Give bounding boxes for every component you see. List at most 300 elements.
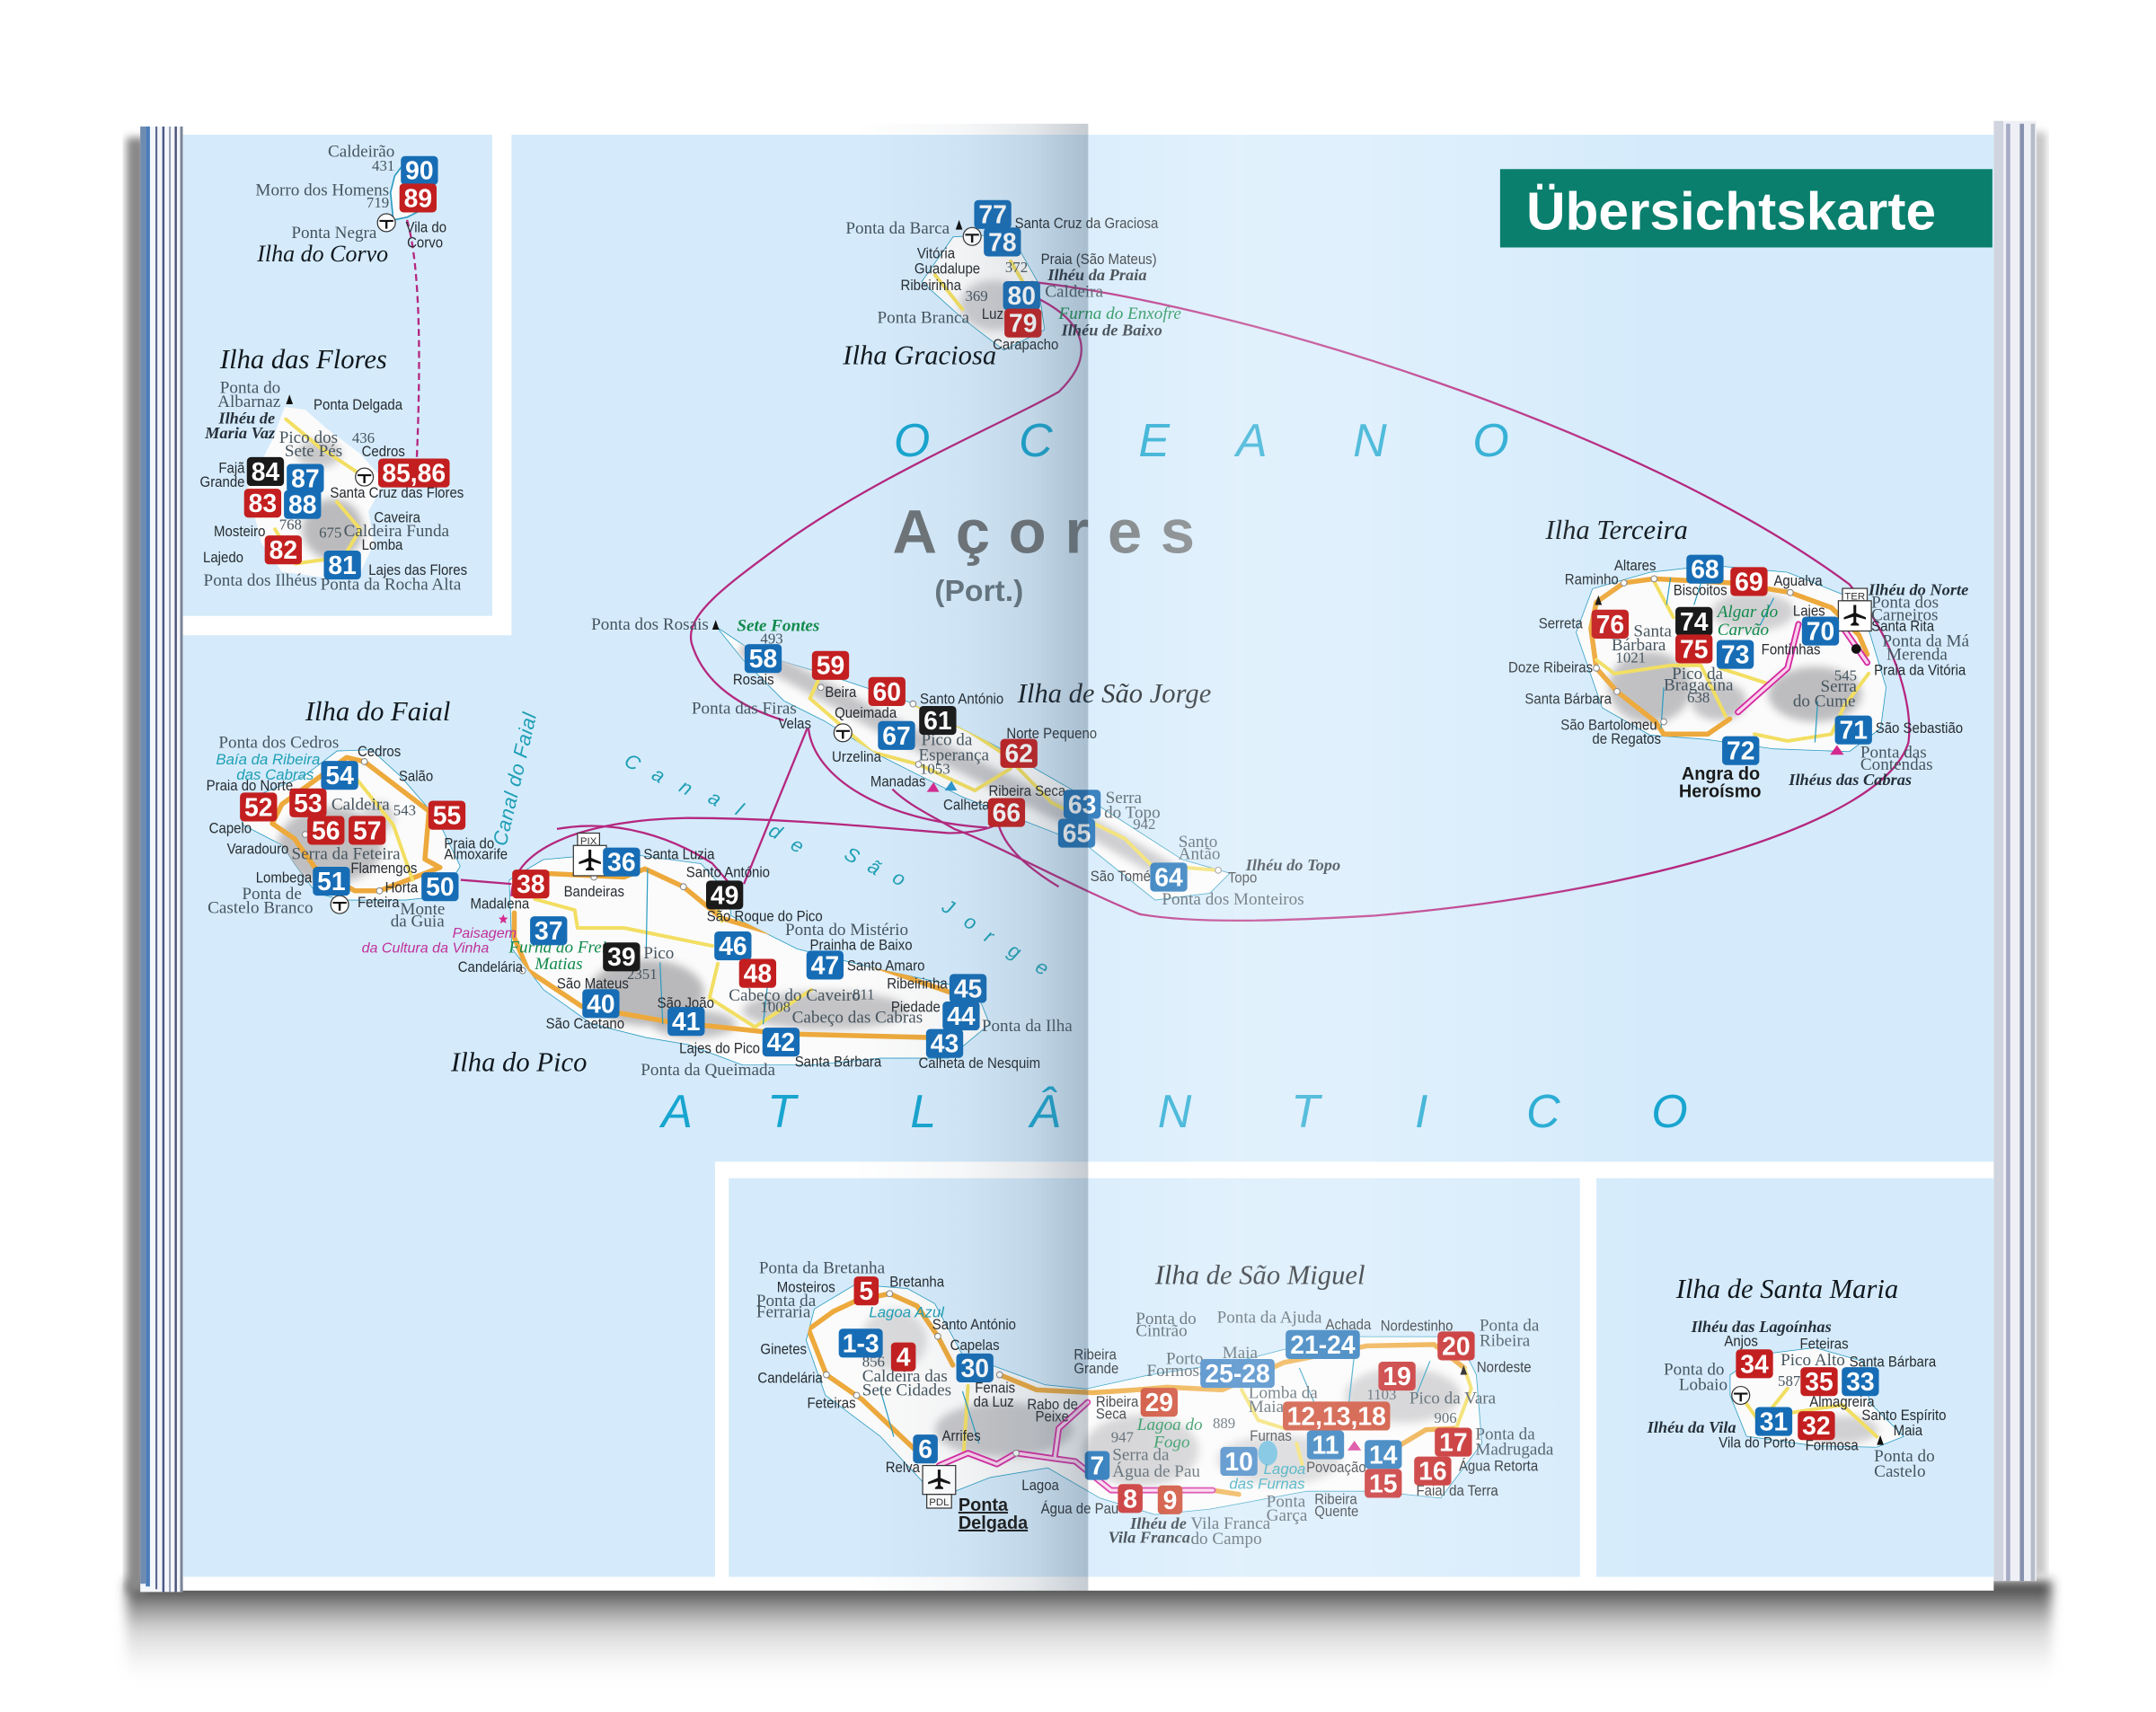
labels: Pico: Ribeirinha xyxy=(887,976,948,993)
labels: São Miguel east: Nordeste xyxy=(1477,1360,1532,1376)
labels: São Miguel west: Ferraria xyxy=(756,1302,811,1321)
labels: São Jorge: Esperança xyxy=(918,746,990,764)
labels: São Miguel east: Fogo xyxy=(1153,1434,1190,1452)
badge 58: 58 xyxy=(749,644,777,673)
labels: São Miguel west: Delgada xyxy=(959,1513,1029,1533)
labels: Pico: Pico xyxy=(643,944,674,963)
labels: Corvo and Flores: Caldeira Funda xyxy=(344,522,450,541)
badge 71: 71 xyxy=(1839,716,1868,745)
labels: Corvo and Flores: Corvo xyxy=(407,235,443,252)
labels: São Jorge: 493 xyxy=(760,630,783,647)
label: Paisagem heritage marker xyxy=(499,914,508,923)
badge 74: 74 xyxy=(1680,607,1709,636)
labels: Graciosa: 372 xyxy=(1005,259,1028,276)
labels: Faial: Castelo Branco xyxy=(208,898,314,917)
badge 65: 65 xyxy=(1063,818,1091,847)
labels: Corvo and Flores: 675 xyxy=(319,524,341,541)
labels: Corvo and Flores: Ponta Delgada xyxy=(314,397,402,413)
badge 87: 87 xyxy=(291,464,320,493)
labels: São Jorge: Ribeira Seca xyxy=(989,783,1065,799)
icon: lighthouse Albarnaz xyxy=(286,394,293,404)
badge 63: 63 xyxy=(1068,790,1096,818)
labels: São Miguel west: Seca xyxy=(1096,1407,1127,1423)
badge 9: 9 xyxy=(1163,1486,1177,1514)
labels: Santa Maria: Anjos xyxy=(1724,1334,1758,1350)
labels: Faial: Cedros xyxy=(358,744,401,760)
badge 14: 14 xyxy=(1369,1440,1398,1469)
badge 47: 47 xyxy=(811,950,839,979)
badge 6: 6 xyxy=(918,1434,932,1463)
labels: Graciosa: Furna do Enxofre xyxy=(1058,304,1181,323)
badge 64: 64 xyxy=(1154,862,1183,891)
icon: peak markers Calheta xyxy=(927,781,957,792)
labels: Pico xyxy=(362,847,1073,1080)
labels: Faial: Varadouro xyxy=(227,842,289,858)
labels: Graciosa: Ribeirinha xyxy=(901,278,961,294)
labels: São Miguel east: Quente xyxy=(1314,1504,1358,1520)
badge 57: 57 xyxy=(353,816,381,844)
badge 78: 78 xyxy=(988,227,1017,256)
labels: Graciosa: 369 xyxy=(965,287,988,304)
labels: Terceira xyxy=(1508,515,1970,802)
labels: Terceira: 638 xyxy=(1687,689,1710,706)
right page stack edge xyxy=(1993,121,2037,1581)
labels: Terceira: Serra xyxy=(1820,677,1857,696)
badge 44: 44 xyxy=(947,1002,976,1030)
labels: São Jorge: Ilhéu do Topo xyxy=(1245,856,1340,874)
title banner: Übersichtskarte: Übersichtskarte xyxy=(1526,181,1936,242)
ocean label: ATLÂNTICO: Â xyxy=(1027,1086,1061,1138)
ocean label: ATLÂNTICO: T xyxy=(1291,1086,1322,1138)
labels: Terceira: Contendas xyxy=(1860,755,1933,774)
labels: São Miguel east: Serra da xyxy=(1112,1445,1170,1464)
icon: airport box Pico xyxy=(573,834,606,876)
labels: Pico: São Roque do Pico xyxy=(707,909,823,925)
labels: Terceira: Ponta dos xyxy=(1871,594,1939,613)
labels: São Jorge: Urzelina xyxy=(832,749,881,765)
badge 33: 33 xyxy=(1846,1367,1875,1396)
labels: São Miguel west: Ponta xyxy=(959,1496,1009,1515)
island: Graciosa xyxy=(922,234,1045,350)
labels: São Jorge: Ilha de São Jorge xyxy=(1017,678,1211,709)
icon: lighthouse Serreta xyxy=(1595,596,1602,604)
labels: São Jorge: São Tomé xyxy=(1091,869,1151,885)
icon: airport box Terceira xyxy=(1838,588,1871,631)
labels: Pico: Ilha do Pico xyxy=(450,1046,587,1077)
ocean label: ATLÂNTICO: C xyxy=(1526,1086,1560,1138)
sea background panel xyxy=(183,135,1993,1577)
badge 82: 82 xyxy=(270,535,297,564)
badge 37: 37 xyxy=(535,916,562,945)
ocean label: OCEANO: O xyxy=(1472,415,1509,467)
labels: Terceira: Bragacina xyxy=(1664,675,1734,694)
labels: Faial: Ilha do Faial xyxy=(305,696,450,727)
labels: Santa Maria: Feteiras xyxy=(1800,1337,1849,1353)
labels: São Miguel west: Sete Cidades xyxy=(862,1381,951,1400)
labels: Pico: 1008 xyxy=(760,998,791,1015)
badge 89: 89 xyxy=(404,183,432,212)
labels: São Miguel west: Relva xyxy=(886,1460,920,1476)
labels: Pico: Santo António xyxy=(686,865,770,881)
labels: Corvo and Flores: Lajedo xyxy=(203,550,243,566)
labels: Faial: Caldeira xyxy=(331,795,390,814)
badge 19: 19 xyxy=(1383,1362,1411,1390)
panel: Corvo and Flores inset xyxy=(183,135,492,616)
labels: Corvo and Flores: Sete Pés xyxy=(285,442,342,461)
labels: Santa Maria: Ilhéu das Lagoínhas xyxy=(1691,1318,1832,1336)
icon: airport Santa Maria xyxy=(1732,1387,1750,1404)
labels: São Miguel west: Fenais xyxy=(975,1381,1015,1397)
gutter shading xyxy=(183,124,1993,1591)
ocean label: ATLÂNTICO: N xyxy=(1158,1086,1192,1138)
labels: Corvo and Flores: Lajes das Flores xyxy=(368,562,467,578)
labels: São Jorge: Rosais xyxy=(733,672,774,688)
labels: São Jorge: Ponta dos Monteiros xyxy=(1162,890,1304,909)
panel: São Miguel xyxy=(729,1178,1580,1577)
icon: lighthouse Castelo xyxy=(1877,1435,1884,1445)
icon: airport Corvo xyxy=(377,214,395,232)
left page stack edge xyxy=(140,127,183,1592)
island: São Jorge xyxy=(715,625,1231,901)
badges: Santa Maria xyxy=(1736,1349,1879,1440)
labels: São Miguel east: Ponta xyxy=(1267,1492,1306,1511)
labels: São Miguel east: Ribeira xyxy=(1480,1331,1531,1350)
badge 83: 83 xyxy=(249,489,277,517)
labels: São Miguel east: Lomba da xyxy=(1249,1384,1318,1403)
labels: São Jorge: Ponta dos Rosais xyxy=(591,615,709,634)
labels: Terceira: Pico da xyxy=(1672,665,1724,684)
labels: São Jorge: Queimada xyxy=(835,705,897,721)
badge 76: 76 xyxy=(1596,610,1624,639)
badge 39: 39 xyxy=(607,942,636,971)
badge 20: 20 xyxy=(1442,1331,1471,1360)
labels: São Miguel east: Faial da Terra xyxy=(1417,1484,1498,1499)
labels: São Jorge: Antão xyxy=(1179,845,1220,864)
labels: Corvo and Flores: 768 xyxy=(279,516,302,533)
badge 29: 29 xyxy=(1145,1388,1173,1416)
labels: São Miguel east: 947 xyxy=(1111,1429,1134,1446)
labels: Terceira: Ilhéus das Cabras xyxy=(1788,771,1912,789)
badge 9 xyxy=(1158,1486,1182,1514)
labels: Graciosa: Ponta da Barca xyxy=(845,219,950,238)
labels: São Miguel west: Grande xyxy=(1074,1361,1118,1377)
labels: Corvo and Flores: Santa Cruz das Flores xyxy=(330,485,464,501)
labels: Pico: Cabeço do Caveiro xyxy=(729,986,861,1005)
badge 41: 41 xyxy=(672,1007,701,1036)
labels: São Miguel west xyxy=(756,1258,1138,1533)
labels: Corvo and Flores: Cedros xyxy=(362,444,405,460)
labels: Graciosa: Caldeira xyxy=(1045,283,1104,302)
labels: Santa Maria: 587 xyxy=(1778,1372,1800,1390)
labels: São Miguel east: do Campo xyxy=(1191,1530,1262,1549)
badge 10: 10 xyxy=(1224,1447,1253,1476)
labels: São Miguel east: Água de Pau xyxy=(1112,1461,1200,1481)
badge 61: 61 xyxy=(923,706,952,735)
labels: Faial: da Guia xyxy=(391,913,445,931)
labels: Pico: Furna do Frei xyxy=(508,939,606,957)
labels: São Miguel west: Rabo de xyxy=(1027,1397,1078,1413)
island: Faial xyxy=(241,749,461,901)
labels: São Miguel east: Porto xyxy=(1166,1349,1203,1368)
heading: Açores: Açores xyxy=(892,497,1195,566)
labels: Terceira: Algar do xyxy=(1716,603,1778,622)
labels: São Miguel west: Santo António xyxy=(932,1317,1016,1333)
labels: Santa Maria: Vila do Porto xyxy=(1719,1435,1796,1452)
labels: Pico: Santa Bárbara xyxy=(795,1055,881,1071)
labels: Pico: Cabeço das Cabras xyxy=(792,1009,923,1028)
badge 53: 53 xyxy=(294,789,323,817)
labels: Pico: Calheta de Nesquim xyxy=(918,1056,1040,1072)
town markers xyxy=(302,576,1793,1456)
labels: Corvo and Flores: Vila do xyxy=(406,220,446,236)
labels: Terceira: Lajes xyxy=(1793,604,1825,620)
labels: São Jorge: Santo xyxy=(1179,833,1217,852)
badge 51: 51 xyxy=(317,867,346,896)
labels: Santa Maria: Santo Espírito xyxy=(1861,1408,1947,1424)
badge 69: 69 xyxy=(1735,567,1763,596)
badge 54: 54 xyxy=(325,761,354,790)
labels: Terceira: Merenda xyxy=(1886,646,1948,665)
labels: São Miguel west: Água de Pau xyxy=(1041,1499,1118,1517)
badge 15: 15 xyxy=(1369,1469,1398,1497)
labels: Graciosa: Ilhéu da Praia xyxy=(1047,266,1147,284)
badge 49: 49 xyxy=(711,880,738,909)
badge 62: 62 xyxy=(1004,739,1033,768)
labels: São Miguel east xyxy=(1109,1260,1554,1549)
labels: Faial: Lombega xyxy=(256,870,312,887)
badge 25-28: 25-28 xyxy=(1205,1359,1270,1388)
badge 11: 11 xyxy=(1312,1431,1339,1460)
labels: São Miguel west: Ponta da Bretanha xyxy=(759,1258,886,1277)
labels: Graciosa: Luz xyxy=(982,306,1003,322)
labels: Santa Maria: Formosa xyxy=(1806,1438,1859,1454)
badge 81: 81 xyxy=(328,551,357,579)
labels: São Miguel east: 1103 xyxy=(1366,1386,1396,1403)
badge 36: 36 xyxy=(607,848,636,877)
labels: Terceira: Altares xyxy=(1614,558,1657,574)
labels: Pico: Madalena xyxy=(470,896,529,913)
icon: airport box Terceira: TER xyxy=(1844,591,1865,602)
icon: lighthouse Nordeste xyxy=(1460,1365,1467,1375)
labels: São Jorge: do Topo xyxy=(1104,804,1161,823)
labels: Corvo and Flores: 436 xyxy=(352,429,375,446)
labels: Pico: São João xyxy=(658,995,714,1011)
badge 77: 77 xyxy=(978,200,1007,229)
labels: São Miguel west: Ponta da xyxy=(756,1292,817,1310)
labels: São Miguel west: Feteiras xyxy=(807,1396,856,1412)
labels: São Miguel west: Ribeira xyxy=(1096,1394,1138,1410)
labels: Terceira: do Cume xyxy=(1793,693,1855,711)
ocean label: OCEANO: A xyxy=(1233,415,1268,467)
icon: airport Flores xyxy=(356,468,374,486)
island: Corvo xyxy=(391,160,429,220)
badge 80: 80 xyxy=(1008,281,1036,310)
labels: Terceira: Ilha Terceira xyxy=(1544,515,1688,545)
labels: Graciosa: Santa Cruz da Graciosa xyxy=(1015,216,1158,232)
labels: Pico: Santo Amaro xyxy=(847,958,925,975)
labels: São Miguel west: da Luz xyxy=(974,1394,1014,1410)
labels: Terceira: Carvão xyxy=(1718,621,1769,640)
badge 50: 50 xyxy=(426,872,455,901)
badge 34: 34 xyxy=(1740,1349,1769,1378)
icon: airport box Ponta Delgada: PDL xyxy=(929,1497,950,1508)
badge 59: 59 xyxy=(817,651,844,680)
badge 7 xyxy=(1085,1452,1109,1480)
labels: Santa Maria: Almagreira xyxy=(1809,1394,1875,1410)
badge 7: 7 xyxy=(1091,1452,1104,1480)
badge 68: 68 xyxy=(1691,555,1719,584)
labels: Terceira: Doze Ribeiras xyxy=(1508,660,1593,676)
icon: peak marker São Sebastião xyxy=(1830,746,1844,755)
labels: Terceira: Fontinhas xyxy=(1762,642,1820,658)
icon: lighthouse Barca xyxy=(956,220,962,230)
badges: Corvo and Flores xyxy=(244,156,450,579)
badge 88: 88 xyxy=(288,490,317,519)
labels: São Miguel east: Cintrão xyxy=(1135,1322,1188,1341)
badge 60: 60 xyxy=(873,677,901,706)
labels: Graciosa: Carapacho xyxy=(993,337,1058,353)
labels: São Miguel west: Caldeira das xyxy=(862,1367,948,1386)
badges: São Jorge xyxy=(745,644,1188,892)
labels: Faial: Ponta dos Cedros xyxy=(218,734,339,753)
labels: São Miguel east: Ponta da Ajuda xyxy=(1217,1308,1322,1327)
badge 67: 67 xyxy=(882,721,911,750)
badge 84: 84 xyxy=(252,457,279,486)
ocean label: OCEANO: O xyxy=(894,415,930,467)
ocean label: ATLÂNTICO: L xyxy=(910,1086,936,1138)
badge 79: 79 xyxy=(1009,309,1038,338)
labels: São Jorge: Pico da xyxy=(922,731,973,750)
labels: Pico: da Cultura da Vinha xyxy=(362,940,489,957)
labels: Pico: Ponta da Queimada xyxy=(641,1061,776,1080)
labels: Terceira: Raminho xyxy=(1565,572,1619,588)
ferry routes xyxy=(461,282,1909,921)
icon: airport São Jorge xyxy=(834,724,852,742)
labels: São Miguel west: Bretanha xyxy=(889,1275,944,1291)
labels: Corvo and Flores: Fajã xyxy=(218,461,245,477)
labels: Santa Maria: Lobaio xyxy=(1679,1375,1727,1394)
labels: Faial: Salão xyxy=(399,769,433,785)
badge 85,86: 85,86 xyxy=(382,458,446,487)
labels: Faial: Flamengos xyxy=(350,860,417,877)
badge 75: 75 xyxy=(1680,634,1708,663)
labels: Corvo and Flores: Maria Vaz xyxy=(204,424,276,442)
labels: Terceira: Ilhéu do Norte xyxy=(1868,581,1968,599)
page sheet xyxy=(183,124,1993,1591)
labels: Terceira: 1021 xyxy=(1615,649,1646,666)
labels: São Miguel east: Pico da Vara xyxy=(1409,1390,1497,1408)
labels: São Jorge: Sete Fontes xyxy=(737,617,819,636)
labels: Faial: Almoxarife xyxy=(444,847,508,863)
labels: Terceira: Ponta das xyxy=(1860,743,1927,762)
ocean label: OCEANO: N xyxy=(1353,415,1387,467)
labels: Terceira: Angra do xyxy=(1682,764,1760,784)
labels: São Miguel east: Furnas xyxy=(1250,1428,1292,1444)
labels: Pico: 2351 xyxy=(627,966,658,983)
badge 45: 45 xyxy=(954,974,982,1002)
heading: (Port.): (Port.) xyxy=(934,575,1023,608)
icon: harbour marker Praia da Vitória xyxy=(1851,644,1861,654)
labels: São Miguel west: Ribeira xyxy=(1074,1347,1117,1363)
labels: Pico: Bandeiras xyxy=(564,884,624,900)
labels: São Miguel west: Capelas xyxy=(950,1337,1000,1354)
labels: São Miguel east: Madrugada xyxy=(1475,1440,1554,1459)
ocean label: ATLÂNTICO: O xyxy=(1651,1086,1688,1138)
labels: São Jorge xyxy=(591,615,1340,909)
labels: Santa Maria: Santa Bárbara xyxy=(1850,1355,1936,1371)
labels: Faial: Serra da Feteira xyxy=(292,845,401,864)
labels: Graciosa: Ponta Branca xyxy=(878,309,970,328)
labels: São Miguel east: Ponta da xyxy=(1480,1317,1540,1336)
badge 52: 52 xyxy=(244,792,273,821)
labels: Corvo and Flores: Morro dos Homens xyxy=(255,181,389,199)
labels: Corvo and Flores: Caveira xyxy=(374,510,420,526)
badges: Terceira xyxy=(1592,555,1872,765)
badge 4 xyxy=(891,1343,915,1372)
labels: São Miguel east: Ponta da xyxy=(1475,1425,1535,1443)
badge 35: 35 xyxy=(1805,1367,1833,1396)
labels: Corvo and Flores: Ponta dos Ilhéus xyxy=(204,571,317,590)
labels: São Jorge: Serra xyxy=(1106,789,1142,807)
labels: São Miguel east: Vila Franca xyxy=(1109,1528,1190,1546)
badge 38: 38 xyxy=(517,869,545,898)
labels: Corvo and Flores: Ponta Negra xyxy=(291,224,377,243)
labels: São Miguel east: Ribeira xyxy=(1314,1492,1357,1508)
labels: Faial xyxy=(207,696,508,931)
labels: Faial: Capelo xyxy=(209,821,252,837)
labels: Pico: 811 xyxy=(853,986,875,1003)
ferry: Corvo to Flores xyxy=(407,220,419,462)
icon: airport box Pico: PIX xyxy=(580,836,597,847)
labels: Santa Maria: Ponta do xyxy=(1874,1447,1935,1466)
labels: São Miguel west: Peixe xyxy=(1036,1409,1069,1425)
icon: harbour marker Angra xyxy=(1722,737,1732,747)
labels: São Miguel east: Ponta do xyxy=(1135,1310,1197,1328)
labels: São Miguel east: 889 xyxy=(1213,1415,1235,1432)
badge 6 xyxy=(913,1434,938,1463)
labels: São Jorge: Manadas xyxy=(870,774,926,790)
labels: Faial: Praia do xyxy=(444,836,494,852)
labels: Faial: Praia do Norte xyxy=(207,778,293,794)
label: Canal do Faial: Canal do Faial xyxy=(489,710,541,848)
labels: Terceira: Ponta da Má xyxy=(1882,631,1970,650)
ocean label: ATLÂNTICO: A xyxy=(658,1086,693,1138)
ocean label: ATLÂNTICO: T xyxy=(767,1086,799,1138)
labels: Santa Maria: Maia xyxy=(1894,1423,1922,1439)
badge 40: 40 xyxy=(587,989,615,1018)
labels: Corvo and Flores: Ponta da Rocha Alta xyxy=(321,576,462,595)
labels: Graciosa xyxy=(842,216,1181,371)
labels: Corvo and Flores xyxy=(200,142,467,595)
icon: airport Faial xyxy=(331,896,349,913)
labels: Corvo and Flores: 431 xyxy=(372,157,394,174)
labels: Corvo and Flores: Pico dos xyxy=(279,428,338,447)
labels: Faial: das Cabras xyxy=(236,766,314,783)
labels: Pico: Matias xyxy=(534,955,583,974)
labels: São Miguel east: 906 xyxy=(1434,1409,1457,1426)
labels: São Miguel east: Vila Franca xyxy=(1191,1514,1271,1533)
labels: São Jorge: Santo António xyxy=(920,692,1003,708)
labels: Graciosa: Guadalupe xyxy=(915,261,980,278)
labels: Graciosa: Vitória xyxy=(917,246,955,262)
island: Pico xyxy=(508,852,990,1065)
labels: Corvo and Flores: Albarnaz xyxy=(217,393,280,411)
icon: airport Graciosa xyxy=(963,227,981,245)
labels: Pico: Piedade xyxy=(891,1000,941,1016)
labels: Pico: Candelária xyxy=(458,959,523,975)
labels: Santa Maria: Ilhéu da Vila xyxy=(1647,1418,1736,1436)
labels: Pico: Ponta do Mistério xyxy=(785,921,908,940)
